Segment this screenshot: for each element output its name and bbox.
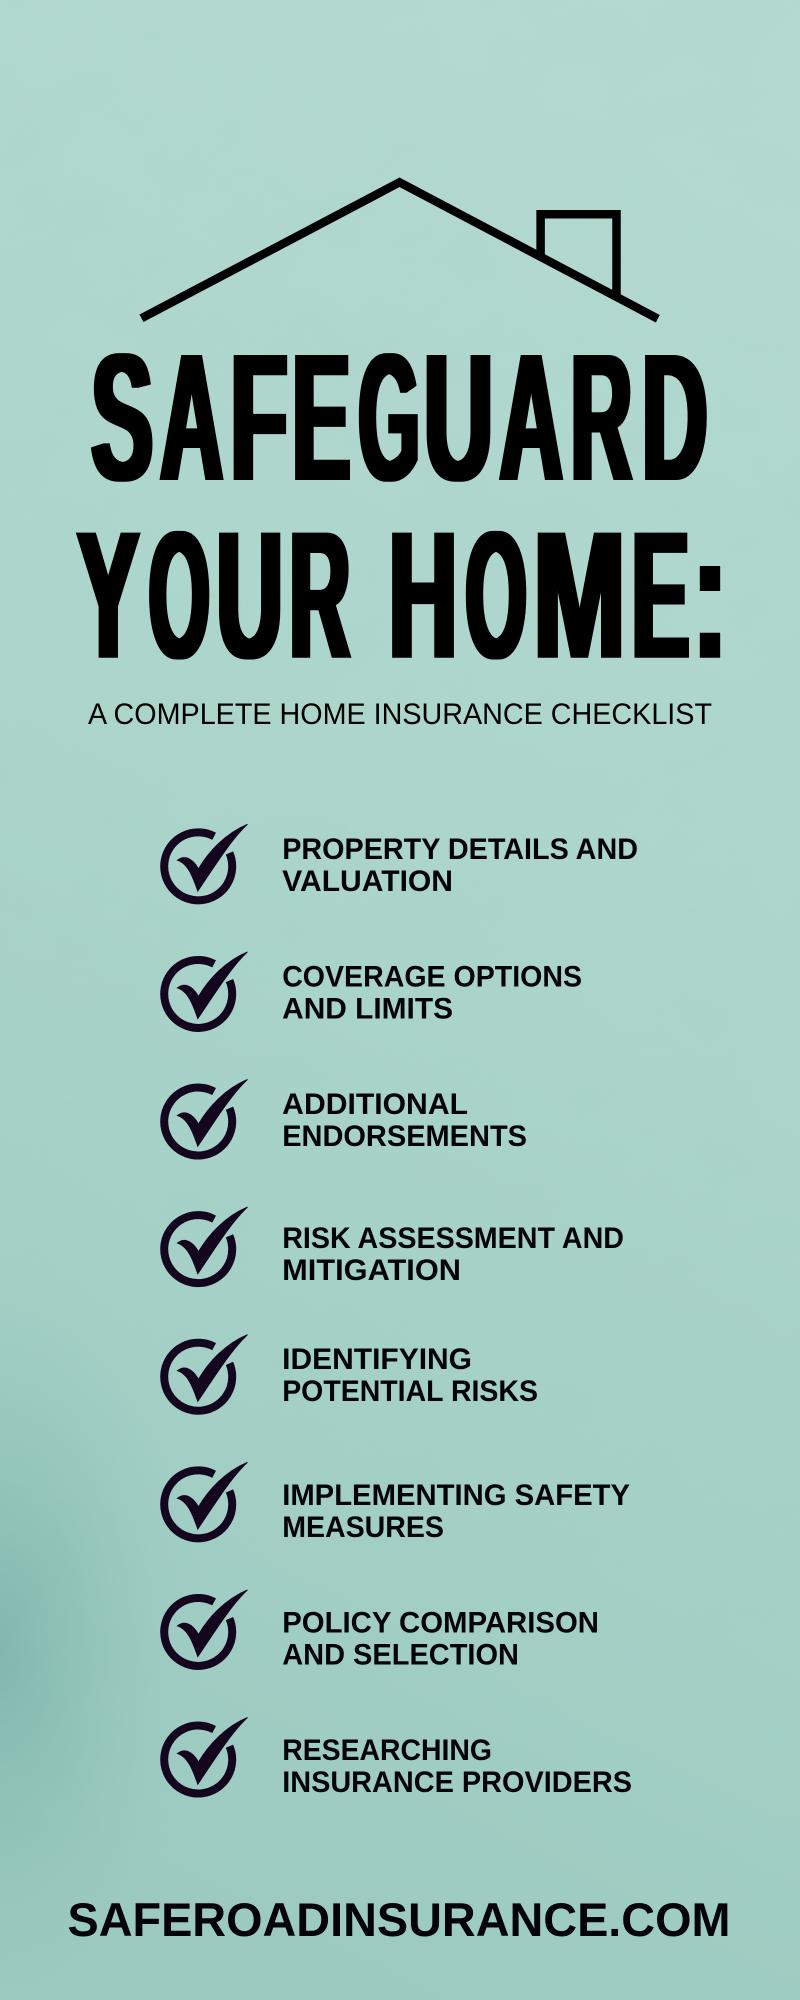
title: U (216, 494, 283, 697)
title: O (149, 494, 210, 697)
item: risk assessment and mitigation (164, 1207, 624, 1287)
title: Y (77, 494, 139, 697)
item: additional endorsements: ADDITIONAL (282, 1088, 468, 1121)
title: H (389, 494, 457, 697)
title: F (230, 316, 288, 519)
title (77, 316, 727, 697)
subtitle: A COMPLETE HOME INSURANCE CHECKLIST (88, 698, 712, 731)
item: identifying potential risks (164, 1335, 538, 1411)
item: property details and valuation: PROPERTY DETAILS AND (282, 833, 638, 866)
item: researching insurance providers: RESEARCHING (282, 1734, 492, 1767)
item: risk assessment and mitigation: MITIGATION (282, 1254, 461, 1287)
title: R (571, 316, 632, 519)
title: D (642, 316, 708, 519)
item: policy comparison and selection (164, 1590, 599, 1672)
title: R (290, 494, 350, 697)
item: implementing safety measures (164, 1462, 630, 1544)
title: E (632, 494, 689, 697)
title: O (466, 494, 527, 697)
title: E (292, 316, 350, 519)
footer website: SAFEROADINSURANCE.COM (68, 1893, 730, 1946)
icon: house roof with chimney (142, 182, 658, 319)
title: S (91, 316, 153, 519)
item: researching insurance providers (164, 1718, 632, 1799)
item: policy comparison and selection: AND SELECTION (282, 1638, 519, 1672)
title: G (359, 316, 420, 519)
item: property details and valuation (164, 824, 638, 900)
item: coverage options and limits (164, 952, 582, 1028)
item: implementing safety measures: IMPLEMENTING SAFETY (282, 1479, 630, 1512)
item: identifying potential risks: IDENTIFYING (282, 1343, 472, 1376)
title: M (533, 494, 626, 697)
item: coverage options and limits: AND LIMITS (282, 992, 453, 1026)
item: additional endorsements: ENDORSEMENTS (282, 1120, 527, 1153)
title: : (693, 494, 727, 697)
item: researching insurance providers: INSURANCE PROVIDERS (282, 1766, 632, 1799)
item: identifying potential risks: POTENTIAL RISKS (282, 1375, 538, 1408)
checklist (164, 824, 638, 1799)
title: A (500, 316, 563, 519)
item: coverage options and limits: COVERAGE OPTIONS (282, 960, 582, 994)
item: implementing safety measures: MEASURES (282, 1511, 444, 1544)
item: policy comparison and selection: POLICY COMPARISON (282, 1606, 599, 1640)
item: additional endorsements (164, 1080, 527, 1156)
title: U (424, 316, 493, 519)
title: A (160, 316, 223, 519)
item: risk assessment and mitigation: RISK ASSESSMENT AND (282, 1222, 624, 1255)
item: property details and valuation: VALUATION (282, 865, 453, 898)
